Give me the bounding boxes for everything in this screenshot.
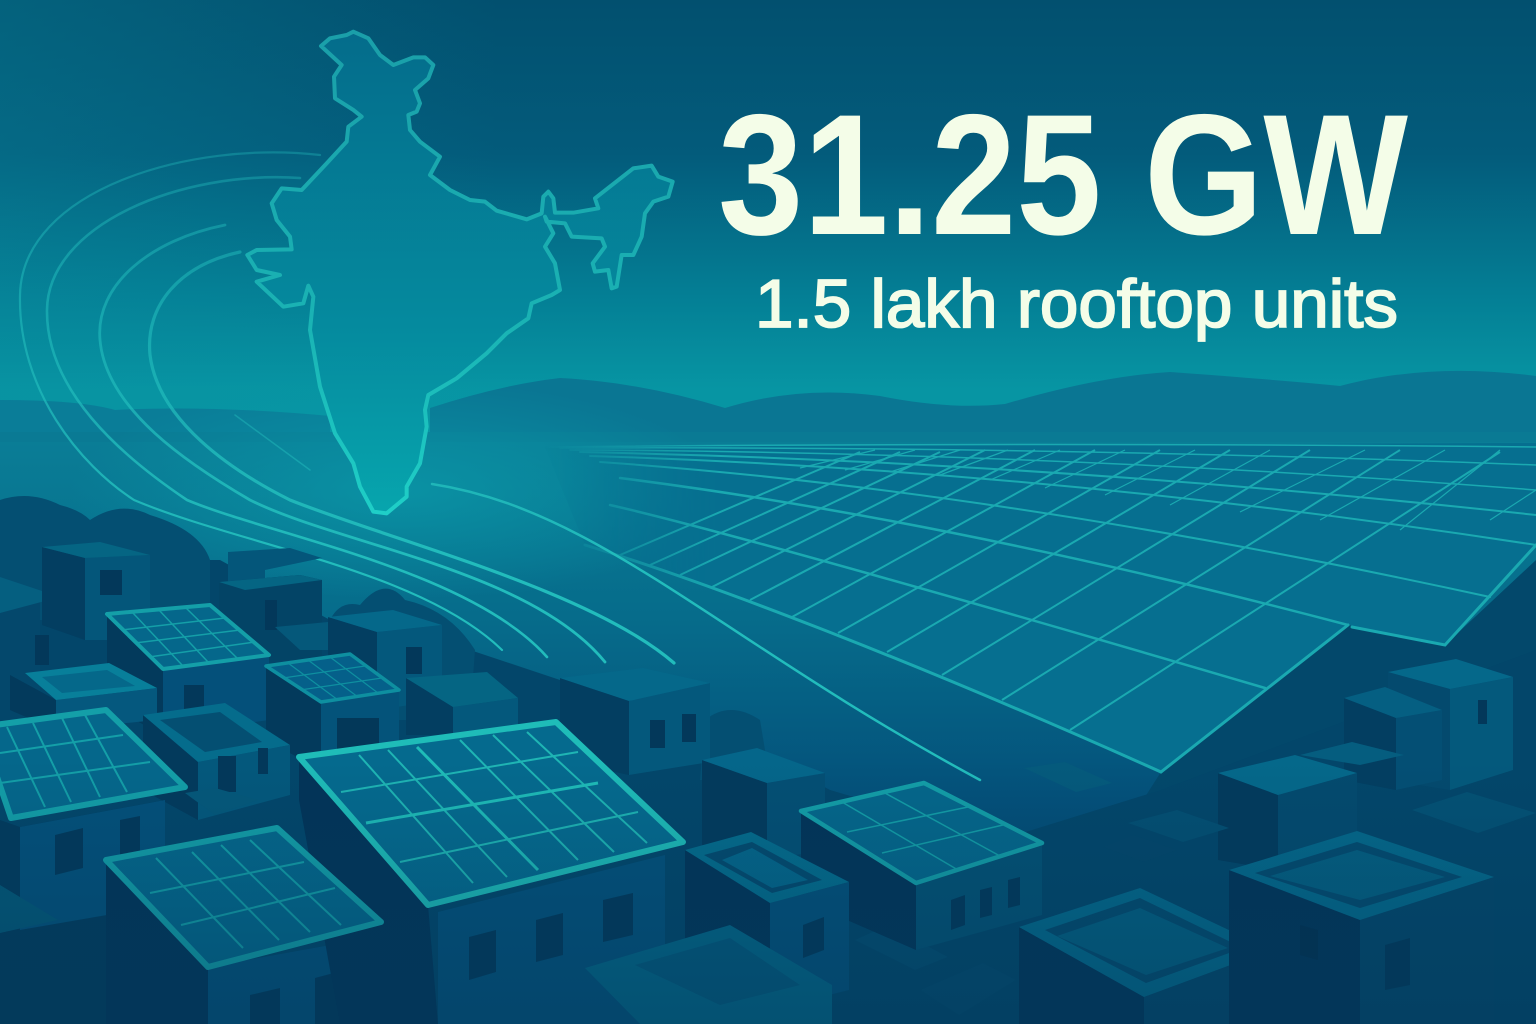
house under big panel [299, 757, 665, 1024]
building centre right [560, 668, 710, 775]
building left low [10, 663, 157, 730]
field column lines [620, 450, 1500, 730]
distant hills [0, 371, 1536, 452]
city base [0, 560, 1536, 1024]
building left [0, 577, 60, 700]
building back 3 [275, 610, 442, 710]
rooftop solar panels [0, 605, 1042, 967]
building middle [406, 672, 518, 735]
far right tower [1344, 659, 1513, 790]
left sky glow [0, 0, 500, 440]
field surface [545, 443, 1536, 772]
parapet house C [1229, 831, 1494, 1024]
subheading: 1.5 lakh rooftop units: 1.5 lakh rooftop units [755, 266, 1398, 342]
solar panel: right [801, 783, 1042, 883]
ground [0, 442, 1536, 1024]
field fine far columns [800, 450, 1536, 530]
house under right panel [801, 811, 1042, 950]
city depth shade [0, 760, 1536, 1024]
shadow beneath solar field [1000, 560, 1536, 1024]
solar panel: back left [107, 605, 269, 669]
building back 2 [219, 548, 322, 660]
building panel 4 walls [107, 614, 269, 735]
small blocks [855, 925, 1016, 1015]
building panel 5 walls [266, 666, 399, 770]
building right block 1 [1218, 742, 1404, 870]
building parapet [143, 703, 290, 820]
building behind panel [702, 748, 825, 860]
headline: 31.25 GW: 31.25 GW [718, 79, 1409, 271]
small roofs [1024, 762, 1536, 862]
tree silhouettes [0, 496, 770, 780]
solar panel: large [299, 722, 683, 905]
solar panel: lower left [106, 828, 381, 967]
solar farm field [545, 443, 1536, 772]
field row lines [545, 444, 1536, 772]
back rooftop buildings [0, 542, 710, 820]
energy swoosh lines [20, 152, 980, 780]
solar panel: back middle [266, 654, 399, 702]
building back 1 [42, 542, 150, 640]
parapet house A [685, 832, 849, 1010]
parapet house B [1019, 888, 1271, 1024]
solar panel: far left [0, 710, 185, 818]
India map outline [247, 32, 673, 513]
front rooftop buildings [0, 757, 1494, 1024]
bottom roof [585, 925, 832, 1024]
right side rooftops [702, 659, 1536, 870]
haze below map [70, 380, 730, 600]
front left house [0, 800, 165, 1024]
house under panel 2 [106, 860, 375, 1024]
